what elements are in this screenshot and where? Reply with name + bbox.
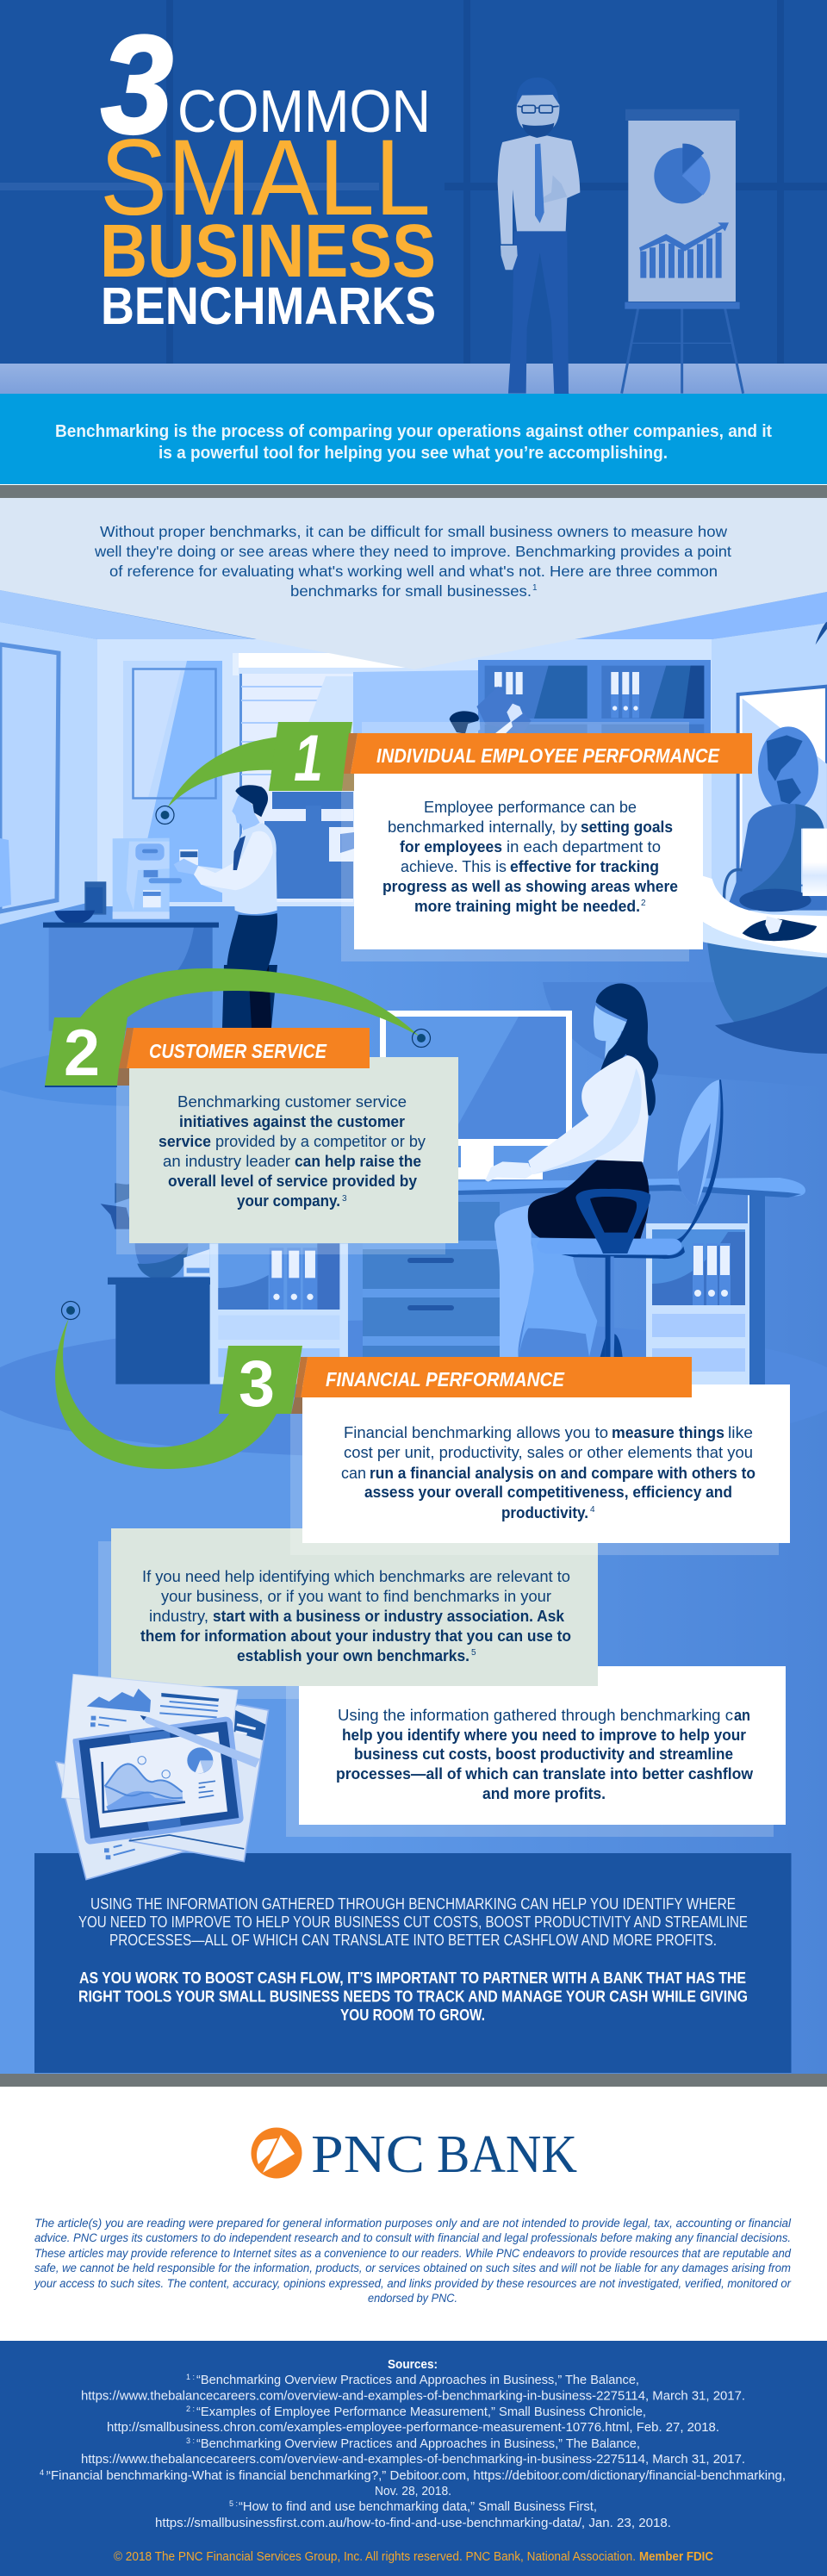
- body text: your company.: [237, 1192, 340, 1210]
- sources footer: 2 :: [186, 2405, 195, 2413]
- orange header: INDIVIDUAL EMPLOYEE PERFORMANCE: [376, 744, 720, 767]
- orange header: [342, 733, 752, 791]
- hero background: [0, 0, 827, 395]
- body text: 4: [590, 1505, 595, 1515]
- number tag: [269, 722, 352, 795]
- closing blue panel: PROCESSES—ALL OF WHICH CAN TRANSLATE INTO BETTER CASHFLOW AND MORE PROFITS.: [109, 1932, 717, 1949]
- orange header: [117, 1028, 370, 1086]
- closing blue panel: RIGHT TOOLS YOUR SMALL BUSINESS NEEDS TO TRACK AND MANAGE YOUR CASH WHILE GIVING: [78, 1988, 748, 2006]
- title: SMALL: [100, 118, 431, 238]
- body text: run a financial analysis on and compare with others to: [370, 1465, 755, 1482]
- body text: help you identify where you need to improve to help your: [342, 1727, 746, 1744]
- green tail and pointer dot: [55, 1301, 277, 1469]
- body text: Benchmarking customer service: [177, 1093, 407, 1111]
- sources footer: 3 :: [186, 2436, 195, 2445]
- disclaimer text: safe, we cannot be held responsible for the information, products, or services obtained on such sites and will not be liable for any damages arising from: [34, 2262, 791, 2274]
- body text: like: [728, 1424, 753, 1441]
- sources footer: “Benchmarking Overview Practices and Approaches in Business,” The Balance,: [196, 2437, 640, 2451]
- definition band: is a powerful tool for helping you see what you’re accomplishing.: [159, 444, 668, 463]
- disclaimer text: endorsed by PNC.: [368, 2292, 457, 2305]
- body text: cost per unit, productivity, sales or other elements that you: [344, 1444, 753, 1461]
- panel text: If you need help identifying which benchmarks are relevant to: [142, 1568, 570, 1585]
- sources footer: Nov. 28, 2018.: [375, 2485, 451, 2498]
- illustration: coffee counter: [43, 838, 219, 1031]
- sources footer: © 2018 The PNC Financial Services Group, Inc. All rights reserved. PNC Bank, National Association.: [114, 2550, 636, 2564]
- body text: [341, 1424, 755, 1521]
- sources footer: “Benchmarking Overview Practices and Approaches in Business,” The Balance,: [196, 2374, 639, 2387]
- body text: [159, 1093, 426, 1210]
- orange header: [291, 1357, 692, 1414]
- body text: measure things: [612, 1424, 724, 1441]
- grey divider: [0, 2074, 827, 2087]
- body text: progress as well as showing areas where: [382, 878, 678, 895]
- panel shadow: [286, 1686, 774, 1837]
- sources footer: [0, 2341, 827, 2576]
- sources footer: “Examples of Employee Performance Measurement,” Small Business Chronicle,: [196, 2405, 646, 2419]
- closing blue panel: [34, 1853, 791, 2073]
- number tag: [45, 1017, 127, 1090]
- ceiling panel: [0, 498, 827, 669]
- illustration: left bookcase and plant: [101, 1183, 348, 1384]
- office room background: [0, 498, 827, 2075]
- callout 1: individual employee performance: [156, 722, 752, 961]
- body text: initiatives against the customer: [179, 1113, 405, 1130]
- panel shadow: [116, 1068, 445, 1254]
- closing blue panel: USING THE INFORMATION GATHERED THROUGH BENCHMARKING CAN HELP YOU IDENTIFY WHERE: [90, 1895, 736, 1913]
- intro text: Without proper benchmarks, it can be difficult for small business owners to measure how: [100, 523, 727, 540]
- body text: 2: [641, 899, 646, 908]
- body card: [302, 1384, 790, 1543]
- body text: business cut costs, boost productivity and streamline: [354, 1745, 733, 1763]
- orange header: CUSTOMER SERVICE: [149, 1040, 327, 1062]
- sources footer: “Financial benchmarking-What is financial benchmarking?,” Debitoor.com, https://debitoor.com/dictionary/financial-benchmarking,: [47, 2469, 786, 2483]
- sources footer: https://www.thebalancecareers.com/overview-and-examples-of-benchmarking-in-business-2275114, March 31, 2017.: [81, 2390, 745, 2404]
- sources footer: https://www.thebalancecareers.com/overview-and-examples-of-benchmarking-in-business-2275114, March 31, 2017.: [81, 2453, 745, 2467]
- intro text: of reference for evaluating what's working well and what's not. Here are three common: [109, 563, 718, 580]
- body text: Employee performance can be: [424, 799, 637, 816]
- sources footer: 1 :: [186, 2373, 195, 2381]
- intro text: [94, 523, 731, 600]
- panel text: industry,: [149, 1608, 208, 1625]
- panel text: 5: [471, 1648, 476, 1658]
- body text: for employees: [400, 838, 502, 856]
- illustration: wall frame and blinds: [123, 653, 479, 902]
- illustration: flip chart: [622, 109, 743, 394]
- intro text: 1: [532, 583, 538, 593]
- body text: processes—all of which can translate into better cashflow: [336, 1765, 754, 1783]
- body card: [129, 1057, 458, 1243]
- sources footer: https://smallbusinessfirst.com.au/how-to-find-and-use-benchmarking-data/, Jan. 23, 2018.: [155, 2517, 671, 2530]
- callout 2: customer service: [45, 968, 458, 1254]
- number tag: 1: [294, 722, 323, 795]
- number tag: [219, 1346, 302, 1421]
- number tag: 2: [64, 1017, 100, 1090]
- body text: Using the information gathered through benchmarking c: [338, 1707, 733, 1724]
- panel text: your business, or if you want to find benchmarks in your: [161, 1588, 551, 1605]
- orange header: FINANCIAL PERFORMANCE: [326, 1368, 565, 1391]
- body text: [336, 1707, 754, 1802]
- panel shadow: [98, 1541, 577, 1699]
- illustration: desk, drawers and monitor: [363, 1011, 805, 1387]
- body text: assess your overall competitiveness, efficiency and: [364, 1484, 732, 1501]
- title: BENCHMARKS: [101, 277, 436, 335]
- disclaimer text: [34, 2217, 792, 2305]
- body text: service: [159, 1133, 211, 1150]
- callout 3: financial performance: [55, 1301, 790, 1555]
- body text: in each department to: [507, 838, 661, 856]
- title: BUSINESS: [100, 209, 436, 293]
- body text: an: [734, 1707, 750, 1724]
- illustration: presenter man: [498, 78, 580, 395]
- body text: setting goals: [581, 818, 673, 836]
- PNC Bank logo: PNC: [311, 2125, 425, 2184]
- panel text: start with a business or industry association. Ask: [213, 1608, 565, 1625]
- sources footer: 4 :: [40, 2468, 48, 2477]
- white disclaimer section: [0, 2087, 827, 2341]
- grey divider: [0, 485, 827, 498]
- panel text: them for information about your industry that you can use to: [140, 1627, 571, 1645]
- sources footer: “How to find and use benchmarking data,” Small Business First,: [239, 2500, 597, 2514]
- body text: provided by a competitor or by: [215, 1133, 426, 1150]
- panel shadow: [341, 722, 689, 961]
- disclaimer text: your access to such sites. The content, accuracy, opinions expressed, and links provided by these resources are not investigated, verified, monitored or: [34, 2277, 791, 2290]
- illustration: seated woman at desk: [485, 983, 722, 1357]
- number tag: 3: [239, 1347, 275, 1421]
- body text: 3: [342, 1194, 347, 1204]
- title: [100, 7, 436, 335]
- panel text: establish your own benchmarks.: [237, 1647, 469, 1664]
- sources footer: Sources:: [388, 2357, 438, 2372]
- panel shadow: [290, 1397, 779, 1555]
- illustration: man with coffee: [174, 785, 277, 1028]
- panel card: [111, 1528, 598, 1686]
- body text: and more profits.: [482, 1785, 606, 1802]
- closing blue panel: YOU ROOM TO GROW.: [340, 2007, 485, 2024]
- body text: Financial benchmarking allows you to: [344, 1424, 608, 1441]
- body text: effective for tracking: [510, 858, 659, 875]
- callout 4: association advice panel: [98, 1528, 598, 1699]
- intro text: benchmarks for small businesses.: [290, 582, 532, 600]
- body card: [354, 774, 703, 949]
- intro text: well they're doing or see areas where they need to improve. Benchmarking provides a point: [94, 543, 731, 560]
- body text: more training might be needed.: [414, 898, 640, 915]
- panel text: [140, 1568, 571, 1664]
- definition band: [0, 394, 827, 484]
- disclaimer text: advice. PNC urges its customers to do independent research and to consult with financial and legal professionals before making any financial decisions.: [34, 2231, 791, 2244]
- body text: productivity.: [501, 1504, 588, 1521]
- PNC Bank logo: [252, 2125, 577, 2184]
- callout 5: information benefits: [286, 1666, 786, 1837]
- body text: overall level of service provided by: [168, 1173, 417, 1190]
- title: COMMON: [177, 78, 431, 145]
- body text: an industry leader: [163, 1153, 290, 1170]
- body text: can help raise the: [295, 1153, 421, 1170]
- sources footer: http://smallbusiness.chron.com/examples-employee-performance-measurement-10776.html, Feb. 27, 2018.: [107, 2421, 719, 2435]
- body text: benchmarked internally, by: [388, 818, 577, 836]
- illustration: whiteboard, globe and reception desk: [703, 622, 827, 958]
- title: 3: [101, 7, 173, 163]
- body text: [382, 799, 678, 915]
- sources footer: Member FDIC: [639, 2550, 713, 2564]
- illustration: bookshelf with person: [450, 660, 711, 736]
- illustration: reports and tablet: [56, 1674, 269, 1880]
- disclaimer text: These articles may provide reference to Internet sites as a convenience to our readers. While PNC endeavors to provide resources that are reputable and: [34, 2247, 791, 2260]
- body card: [299, 1666, 786, 1825]
- green tail and pointer dot: [156, 737, 280, 824]
- definition band: Benchmarking is the process of comparing your operations against other companies, and it: [55, 422, 772, 441]
- PNC Bank logo: BANK: [437, 2125, 577, 2184]
- body text: achieve. This is: [401, 858, 507, 875]
- disclaimer text: The article(s) you are reading were prepared for general information purposes only and are not intended to provide legal, tax, accounting or financial: [34, 2217, 792, 2230]
- body text: can: [341, 1465, 366, 1482]
- closing blue panel: AS YOU WORK TO BOOST CASH FLOW, IT’S IMPORTANT TO PARTNER WITH A BANK THAT HAS THE: [79, 1969, 746, 1987]
- sources footer: 5 :: [229, 2499, 238, 2508]
- green tail and pointer dot: [80, 968, 431, 1048]
